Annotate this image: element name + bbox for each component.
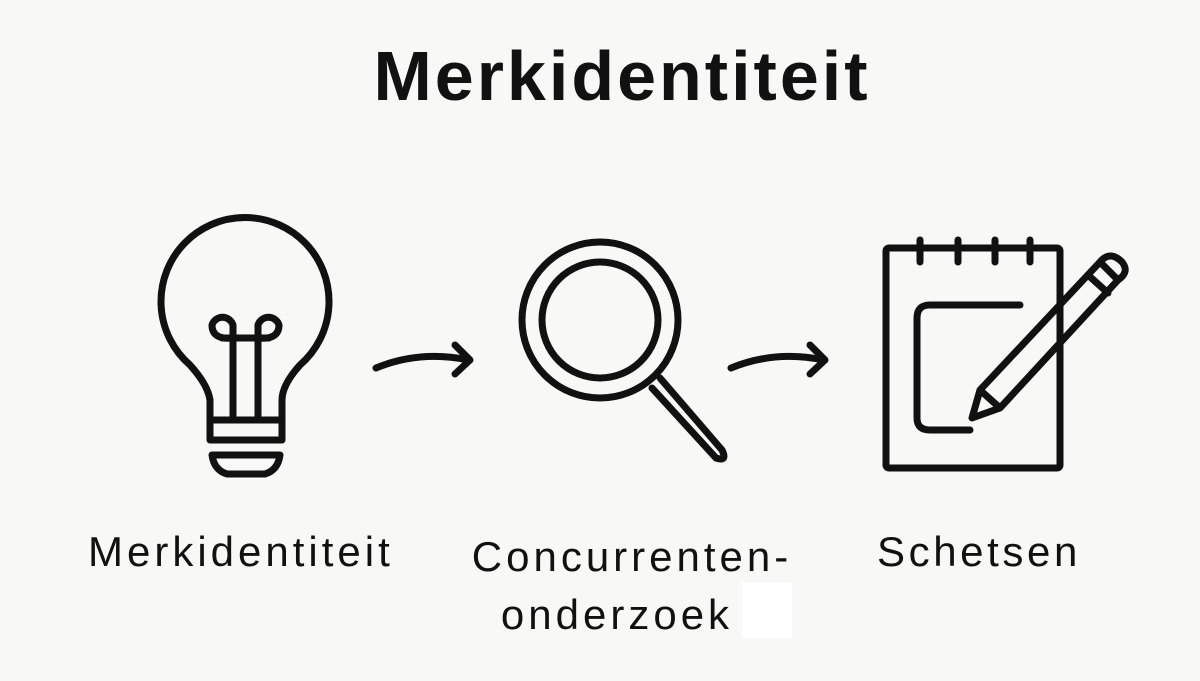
icon: notepad with pencil <box>886 240 1125 468</box>
label: Concurrentenonderzoek <box>472 533 792 638</box>
icon: magnifier <box>522 242 724 459</box>
arrow 2 <box>731 345 825 374</box>
label: Schetsen: Schetsen <box>877 528 1081 575</box>
label: Concurrentenonderzoek: onderzoek <box>501 591 733 638</box>
label: Concurrentenonderzoek: Concurrenten- <box>472 533 792 580</box>
white patch <box>742 582 792 638</box>
arrow 1 <box>376 345 470 374</box>
label: Merkidentiteit: Merkidentiteit <box>88 528 394 575</box>
title: Merkidentiteit <box>373 37 871 115</box>
icon: lightbulb <box>161 218 329 474</box>
